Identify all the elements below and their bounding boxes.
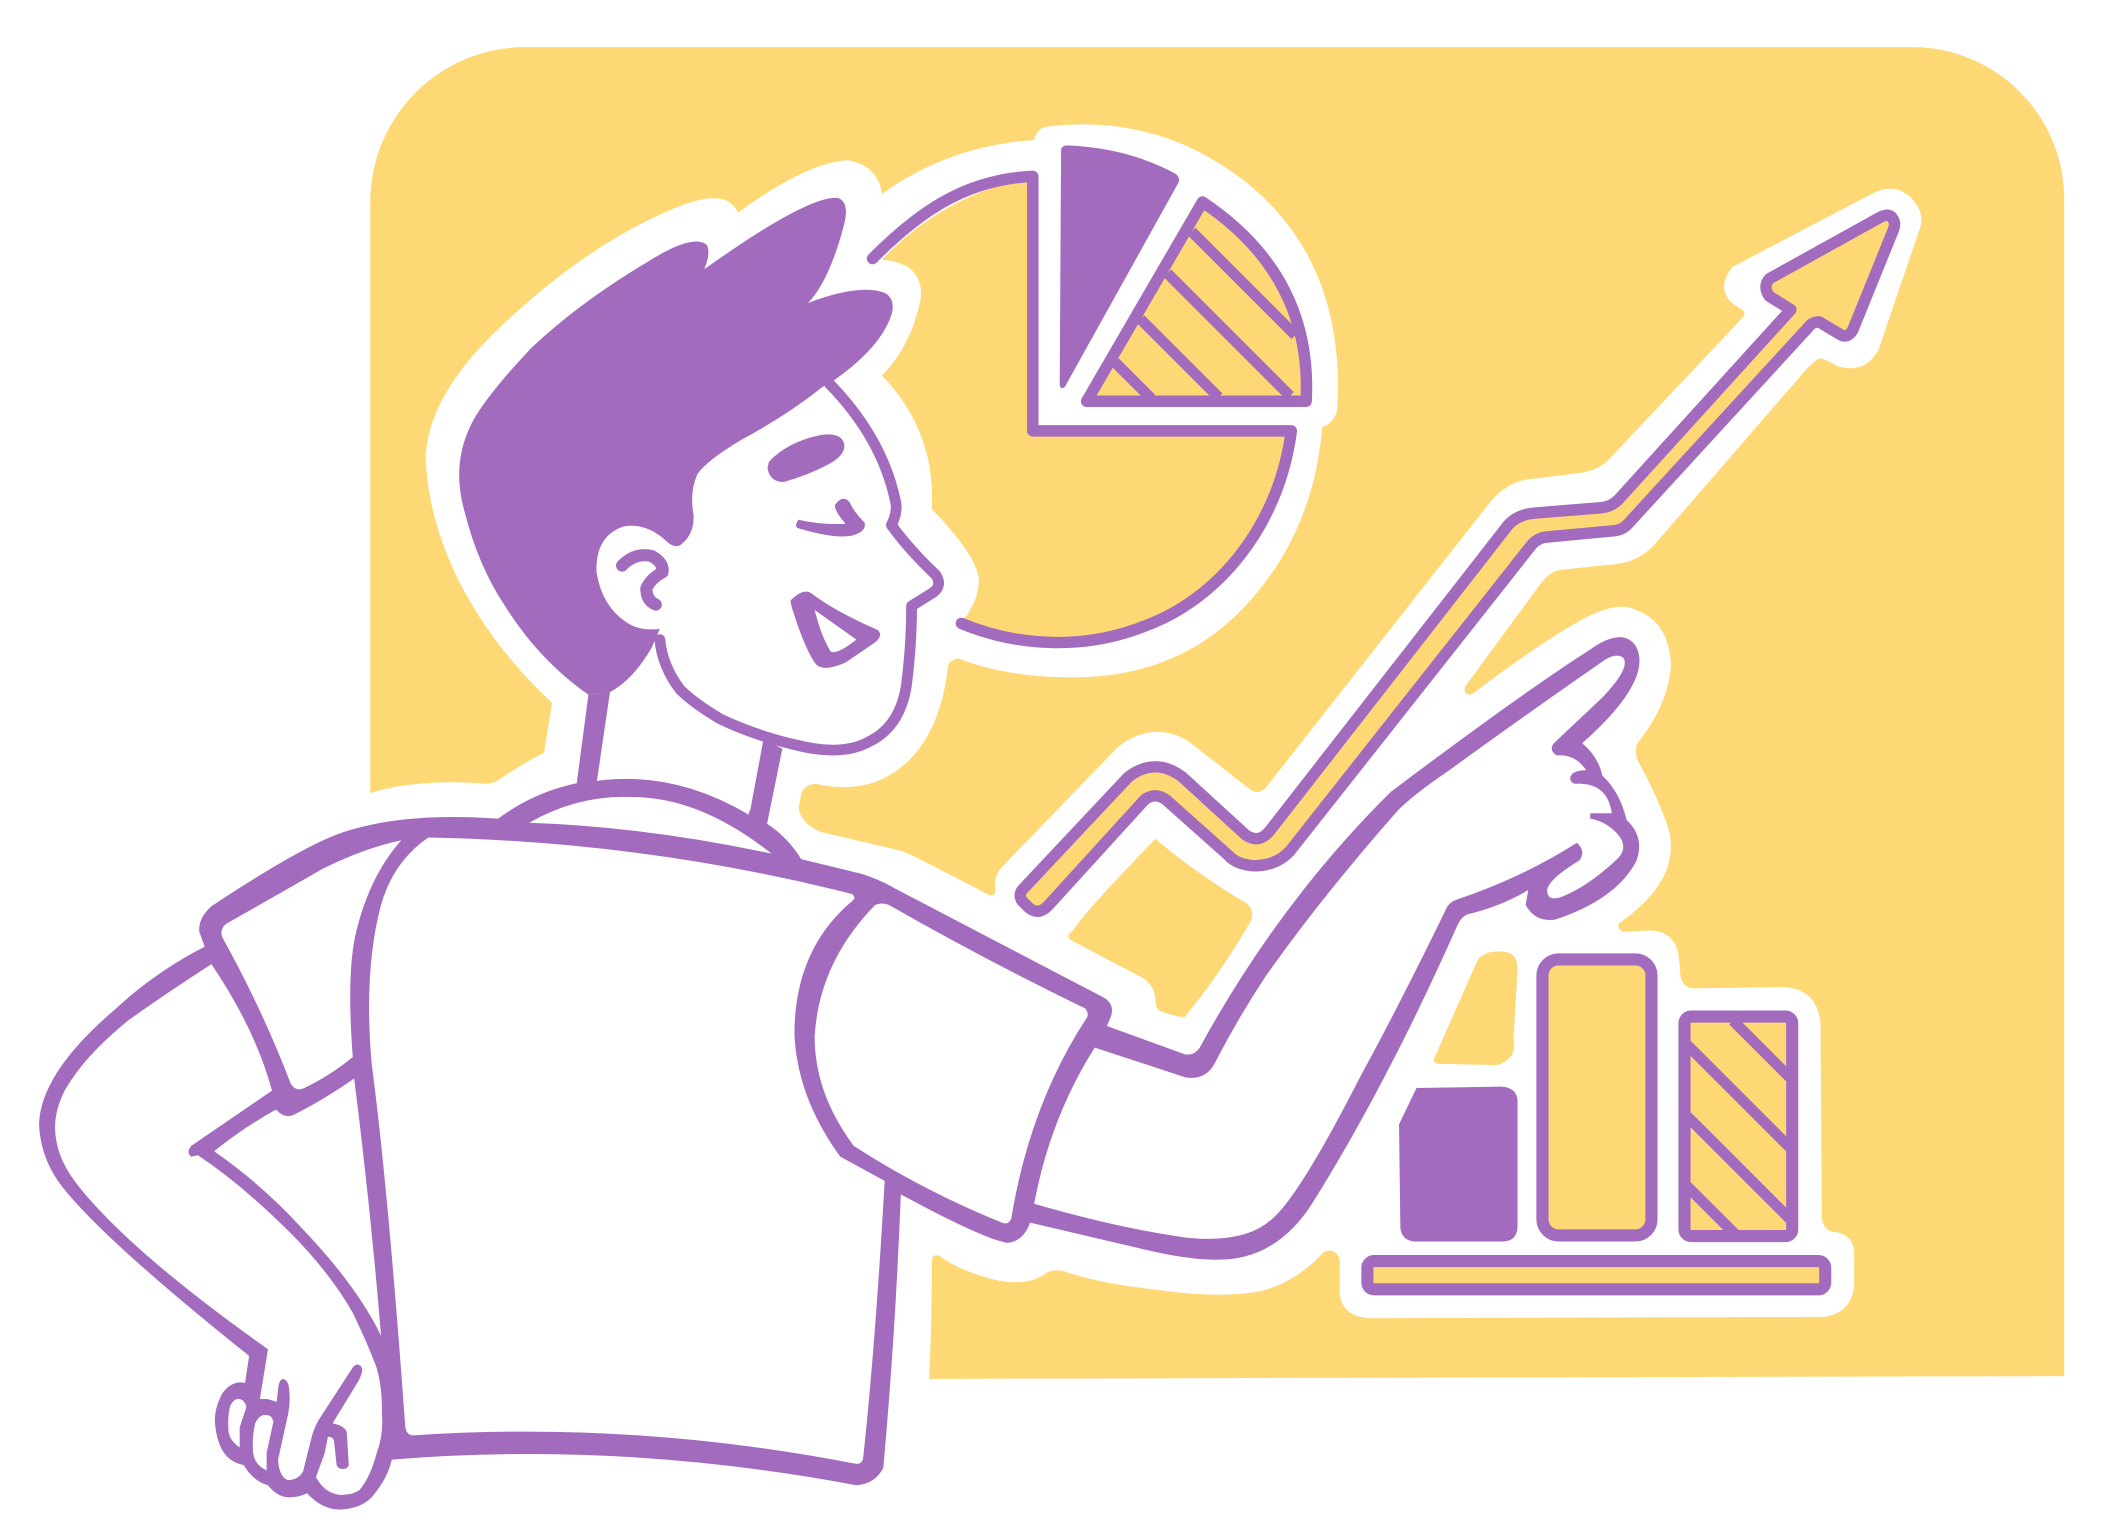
gap between arm and torso: [214, 1079, 381, 1336]
shelf: [1367, 1261, 1825, 1289]
pie hatched slice: [1087, 202, 1307, 401]
yellow gap: above solid book: [1434, 951, 1518, 1065]
pie large slice: [873, 176, 1291, 643]
pie chart: [873, 145, 1307, 643]
solid book: [1399, 1087, 1518, 1241]
striped book: [1684, 1017, 1792, 1236]
yellow background panel: [370, 47, 2064, 1379]
right arm and pointing hand: [1034, 656, 1625, 1239]
eye: [796, 499, 865, 536]
pie purple slice: [1060, 145, 1179, 388]
right sleeve: [815, 904, 1088, 1223]
eyebrow: [768, 434, 844, 482]
bookshelf: [1367, 959, 1825, 1289]
shirt torso: [369, 838, 885, 1464]
yellow gap: between sleeve and arrow: [1068, 839, 1252, 1017]
left arm and hand: [55, 964, 382, 1495]
face outline: [660, 384, 939, 750]
mouth: [790, 592, 880, 668]
body silhouette: [39, 637, 1639, 1510]
rising arrow: [1020, 215, 1895, 911]
finger gaps: [228, 1399, 273, 1470]
collar opening: [529, 797, 772, 854]
neck: [576, 673, 763, 815]
hair: [459, 198, 893, 695]
left shoulder panel: [221, 840, 401, 1089]
neck outlines: [576, 692, 782, 828]
tall yellow book: [1542, 959, 1652, 1235]
ear detail: [622, 555, 663, 605]
face: [592, 384, 939, 750]
figure: man pointing: [39, 198, 1639, 1510]
